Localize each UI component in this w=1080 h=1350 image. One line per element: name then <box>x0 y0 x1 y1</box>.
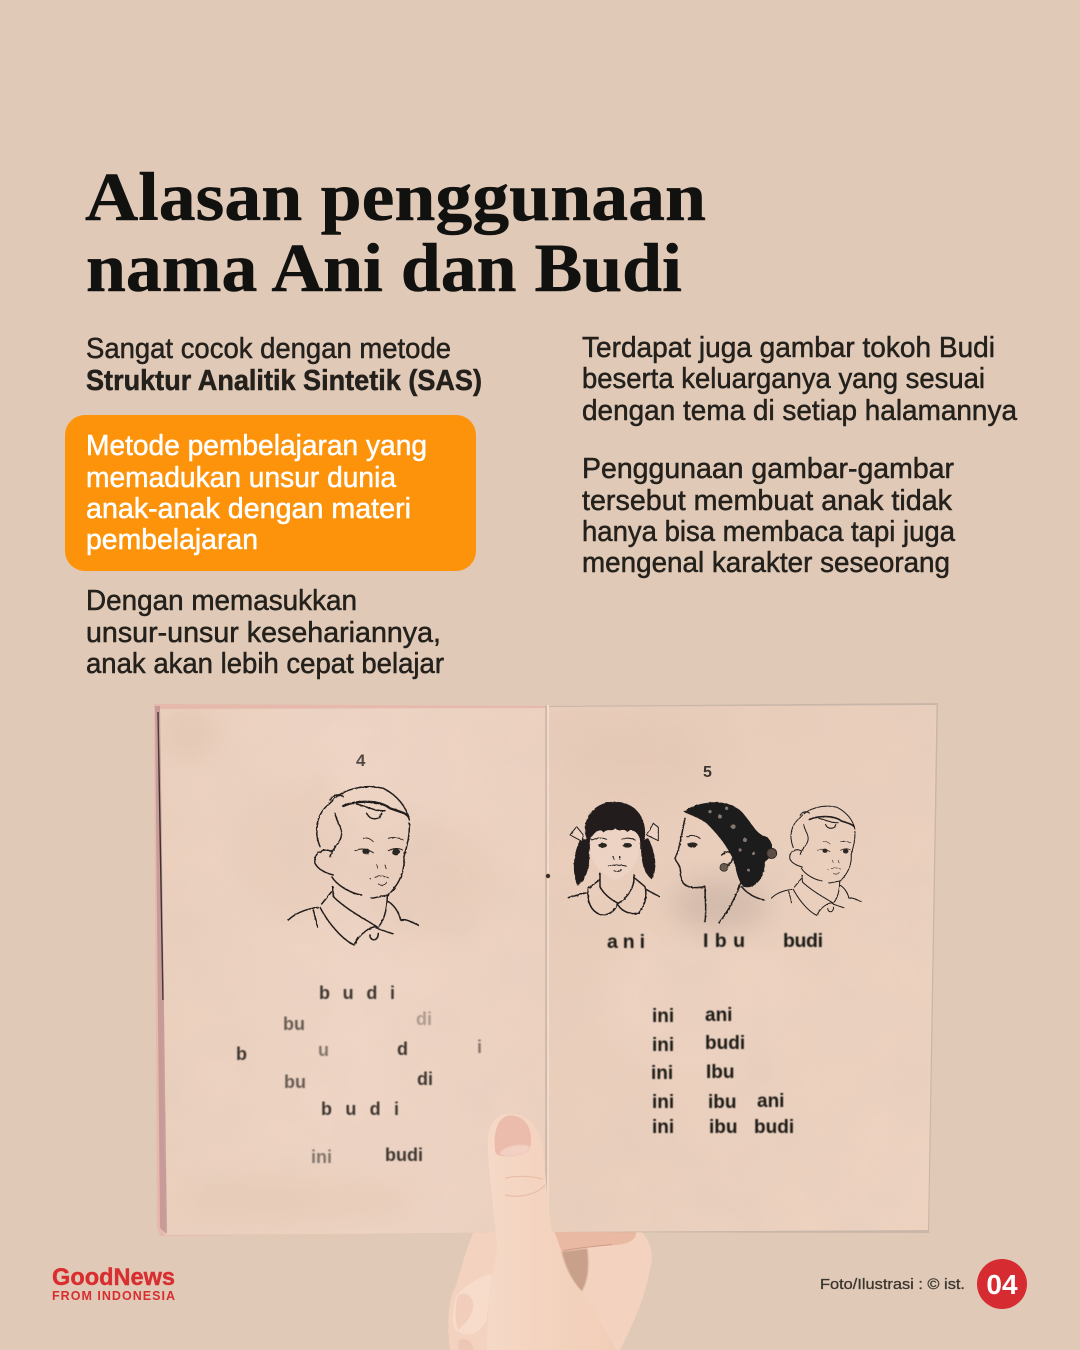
page number badge <box>977 1259 1027 1309</box>
word table: budi <box>705 1033 745 1054</box>
logo: GoodNews from Indonesia: GoodNews <box>52 1264 175 1291</box>
text block: SAS method <box>86 333 482 397</box>
text block: pictures of Budi and family: beserta keluarganya yang sesuai <box>582 363 985 395</box>
illustration: Ani portrait <box>568 802 659 915</box>
text block: use of pictures: mengenal karakter seseorang <box>582 547 950 579</box>
callout text: Metode pembelajaran yang <box>86 430 427 462</box>
caption labels: a n i <box>607 931 645 953</box>
text block: pictures of Budi and family: Terdapat juga gambar tokoh Budi <box>582 332 995 364</box>
title: nama Ani dan Budi <box>86 230 682 306</box>
page number badge: 04 <box>986 1269 1018 1300</box>
text block: use of pictures: Penggunaan gambar-gambar <box>582 453 954 485</box>
text block: use of pictures <box>582 453 956 579</box>
hand: thumb in front of book <box>487 1113 617 1350</box>
left page word exercises: b u d i <box>321 1099 399 1119</box>
photo credit: Foto/Ilustrasi : © ist. <box>820 1276 965 1293</box>
title <box>85 159 706 306</box>
left page word exercises: di <box>417 1069 433 1089</box>
left page word exercises: budi <box>385 1145 423 1165</box>
caption labels: I b u <box>703 930 745 952</box>
word table: ini <box>652 1035 674 1056</box>
callout text: anak-anak dengan materi <box>86 493 411 525</box>
left page word exercises: b <box>236 1044 247 1064</box>
book <box>154 703 940 1238</box>
text block: SAS method: Sangat cocok dengan metode <box>86 333 451 365</box>
left page word exercises: d <box>397 1039 408 1059</box>
illustration: left page boy portrait <box>288 787 418 945</box>
title: Alasan penggunaan <box>85 159 706 235</box>
left page word exercises: ini <box>311 1147 332 1167</box>
right page number: 5 <box>703 764 712 781</box>
left page word exercises: di <box>416 1009 432 1029</box>
callout text <box>86 430 427 556</box>
left page word exercises: u <box>318 1040 329 1060</box>
text block: daily elements: anak akan lebih cepat belajar <box>86 648 444 680</box>
left page word exercises: bu <box>283 1014 305 1034</box>
word table: Ibu <box>706 1062 734 1083</box>
hand behind book <box>448 1231 652 1350</box>
text block: use of pictures: tersebut membuat anak tidak <box>582 485 952 517</box>
left page word exercises: b u d i <box>319 983 395 1003</box>
callout text: memadukan unsur dunia <box>86 462 397 494</box>
word table: budi <box>754 1117 794 1138</box>
left page <box>154 704 547 1236</box>
logo: GoodNews from Indonesia: FROM INDONESIA <box>52 1289 175 1303</box>
callout text: pembelajaran <box>86 524 258 556</box>
left page word exercises <box>236 983 482 1167</box>
illustration: Ibu portrait <box>675 802 777 923</box>
word table: ini <box>652 1092 674 1113</box>
word table: ini <box>652 1117 674 1138</box>
left page word exercises: bu <box>284 1072 306 1092</box>
left page word exercises: i <box>477 1037 482 1057</box>
caption labels <box>607 930 823 953</box>
word table <box>651 1005 794 1138</box>
word table: ibu <box>709 1117 738 1138</box>
left page number: 4 <box>356 751 366 770</box>
caption labels: budi <box>783 930 823 952</box>
text block: daily elements: unsur-unsur kesehariannya, <box>86 617 441 649</box>
word table: ani <box>757 1091 784 1112</box>
text block: pictures of Budi and family <box>582 332 1018 427</box>
right page <box>545 703 938 1233</box>
text block: daily elements <box>86 585 444 680</box>
word table: ini <box>651 1063 673 1084</box>
text block: daily elements: Dengan memasukkan <box>86 585 357 617</box>
callout: orange highlight <box>65 415 476 571</box>
text block: SAS method: Struktur Analitik Sintetik (SAS) <box>86 365 482 397</box>
paper mottling <box>162 910 164 1000</box>
logo: GoodNews from Indonesia <box>52 1264 175 1303</box>
text block: use of pictures: hanya bisa membaca tapi juga <box>582 516 956 548</box>
text block: pictures of Budi and family: dengan tema di setiap halamannya <box>582 395 1018 427</box>
word table: ibu <box>708 1092 736 1113</box>
word table: ini <box>652 1006 674 1027</box>
word table: ani <box>705 1005 732 1026</box>
illustration: Budi portrait <box>771 806 861 915</box>
